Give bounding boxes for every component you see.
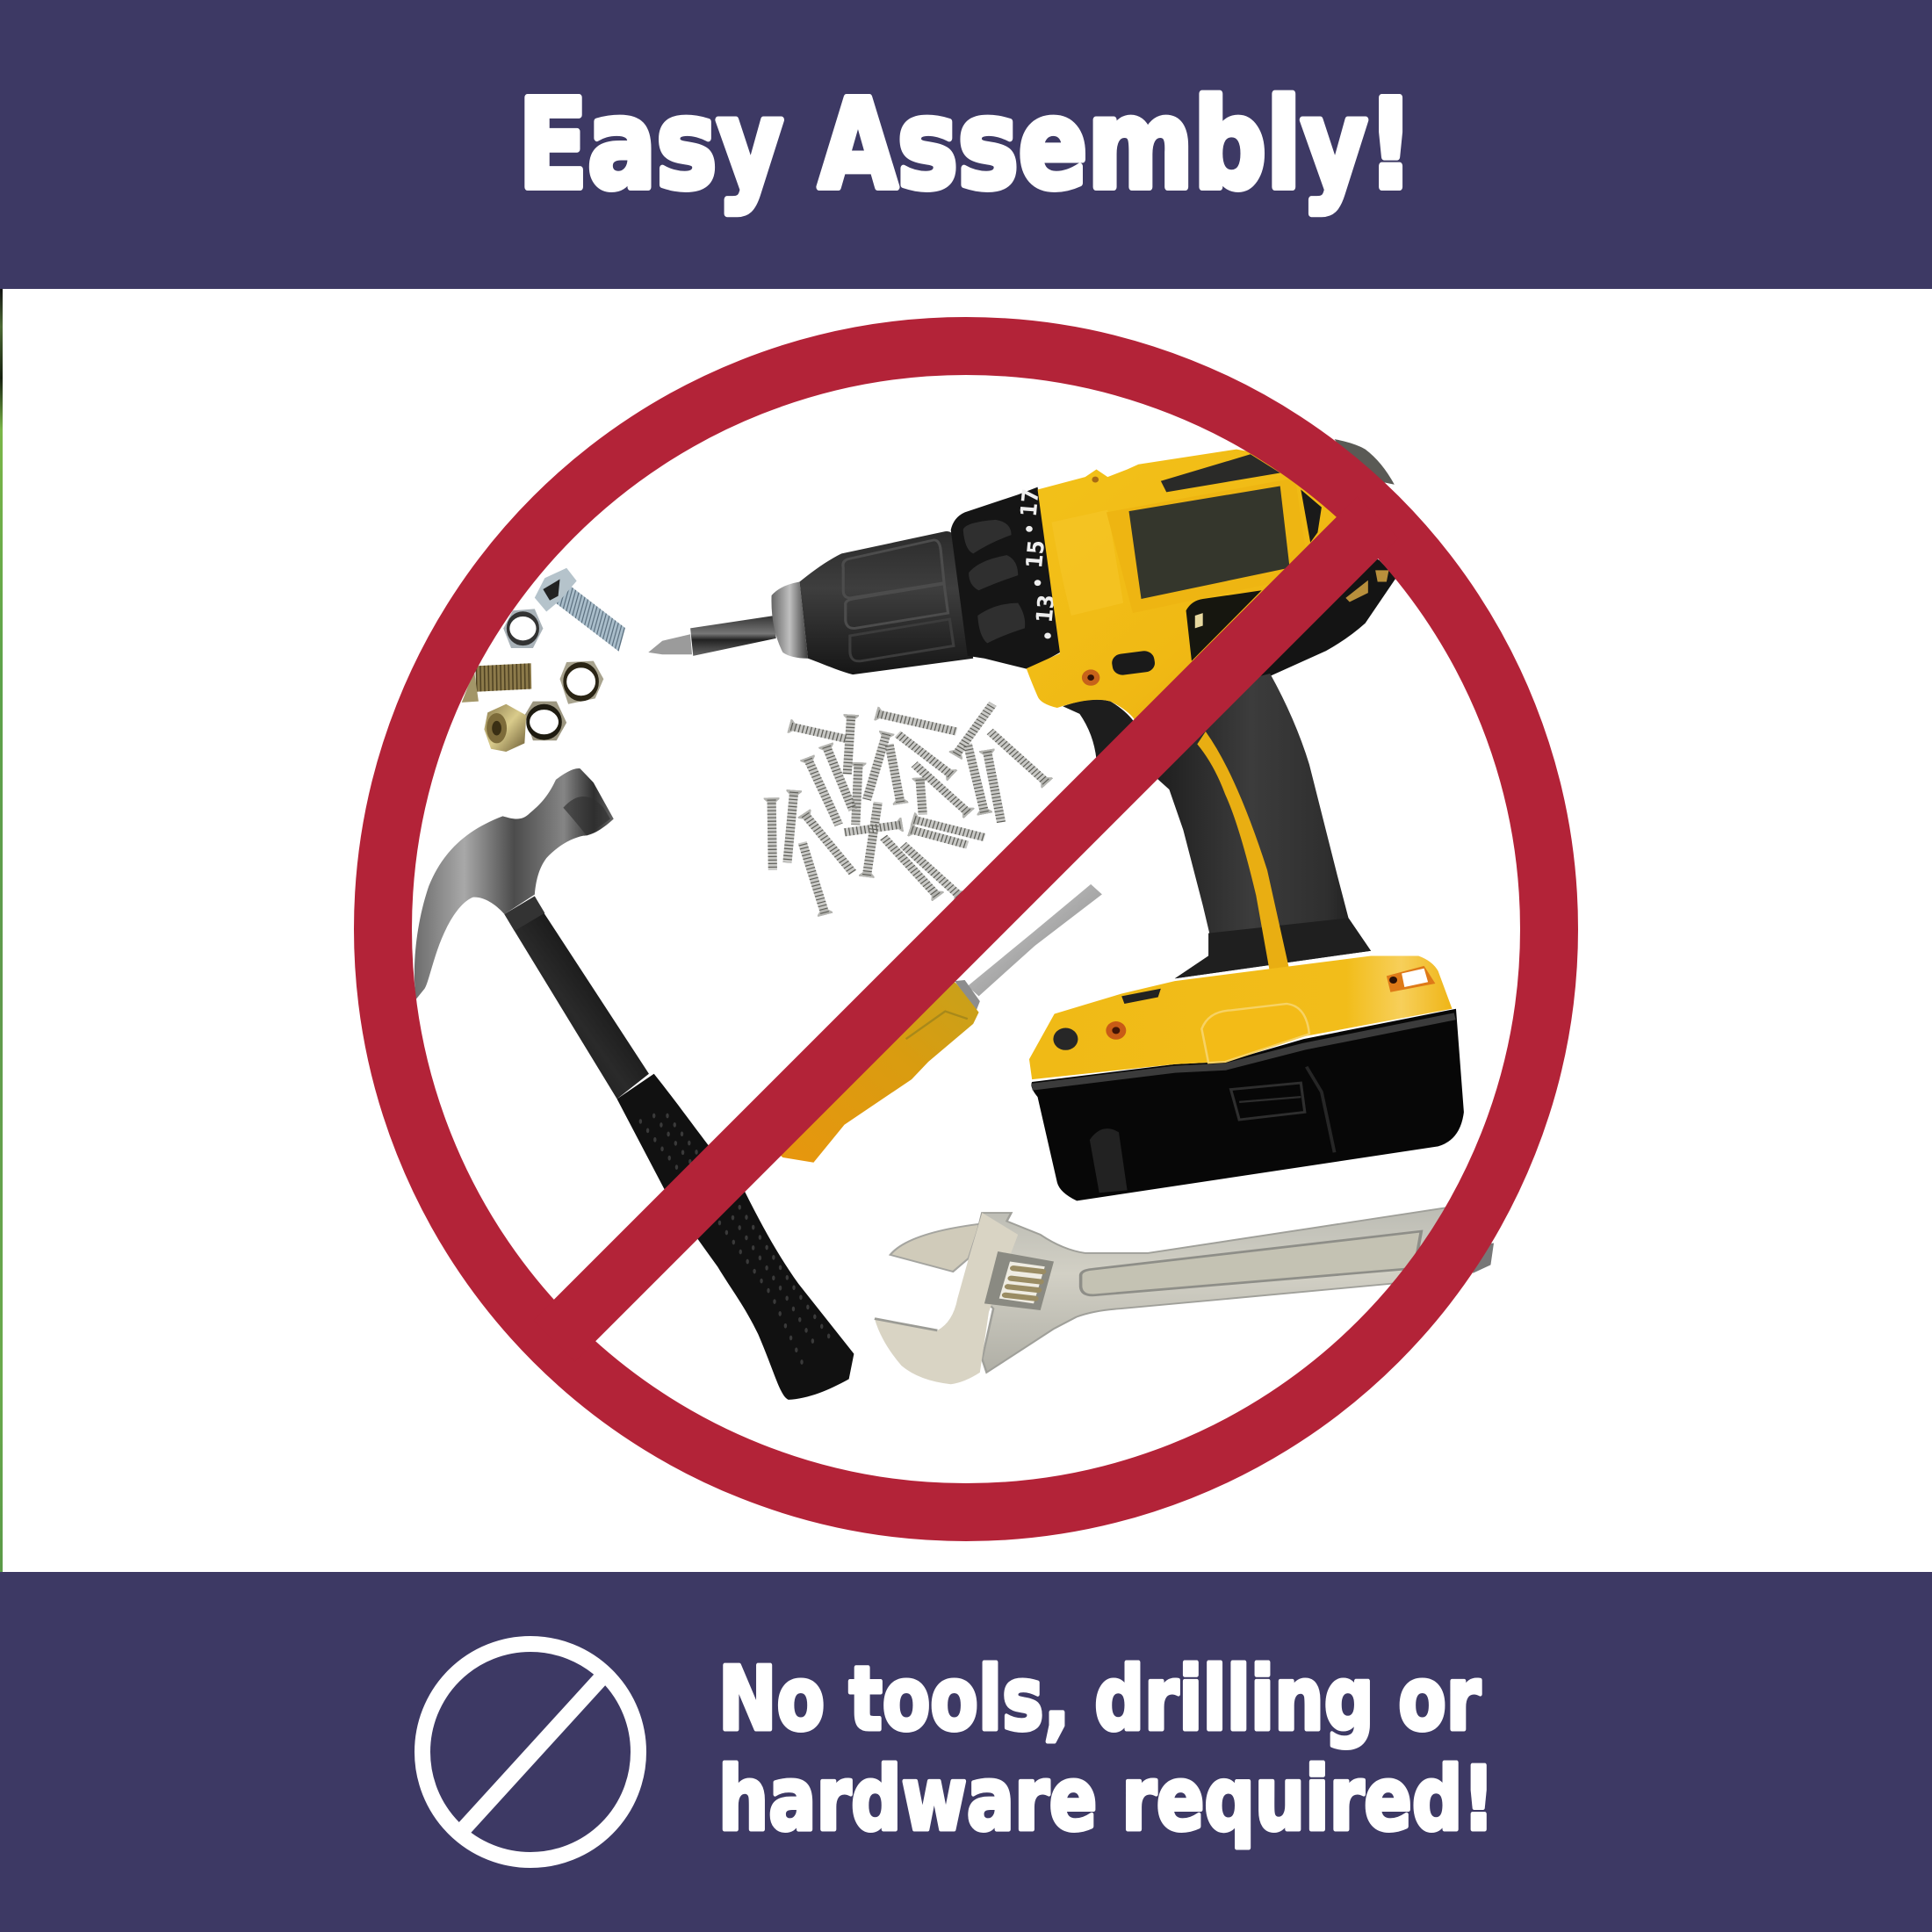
icon: wrench [875,1208,1494,1384]
prohibition sign [383,346,1549,1512]
icon: pile of screws [772,703,1046,913]
header band [0,0,1932,289]
drill top trim [1161,454,1280,492]
screwdriver handle [766,971,979,1163]
footer message [718,1647,1495,1850]
icon: nuts and bolts [462,568,622,752]
drill nose [771,582,808,659]
drill torque numbers: 17 [1015,487,1044,518]
screwdriver shaft [968,884,1102,996]
drill torque numbers: 13 [1030,594,1060,624]
icon: hammer [415,768,854,1400]
drill torque numbers [1015,487,1060,638]
icon: cordless drill [648,439,1464,1200]
drill torque numbers: 15 [1020,539,1049,569]
drill grip [1152,674,1371,978]
tools illustration [415,439,1494,1400]
hammer head [415,768,614,999]
icon: white prohibition symbol [422,1644,638,1860]
battery top [1029,955,1453,1079]
hammer grip [617,1074,854,1400]
drill window [1107,478,1309,613]
drill rear [1335,439,1395,485]
left edge strip [0,288,3,1572]
footer message: No tools, drilling or [718,1647,1481,1750]
drill bit [648,634,692,654]
icon: screwdriver [766,884,1102,1163]
red diagonal bar [554,517,1378,1341]
battery base [1031,1009,1464,1200]
drill switch [1111,650,1156,676]
title: Easy Assembly! [518,74,1414,217]
drill collar [951,487,1063,669]
footer band [0,1572,1932,1932]
footer message: hardware required! [718,1748,1495,1850]
drill grip stripe [1197,732,1290,974]
drill body [1027,450,1343,722]
red ring [383,346,1549,1512]
drill chuck [799,531,973,674]
hammer shaft [504,897,649,1099]
